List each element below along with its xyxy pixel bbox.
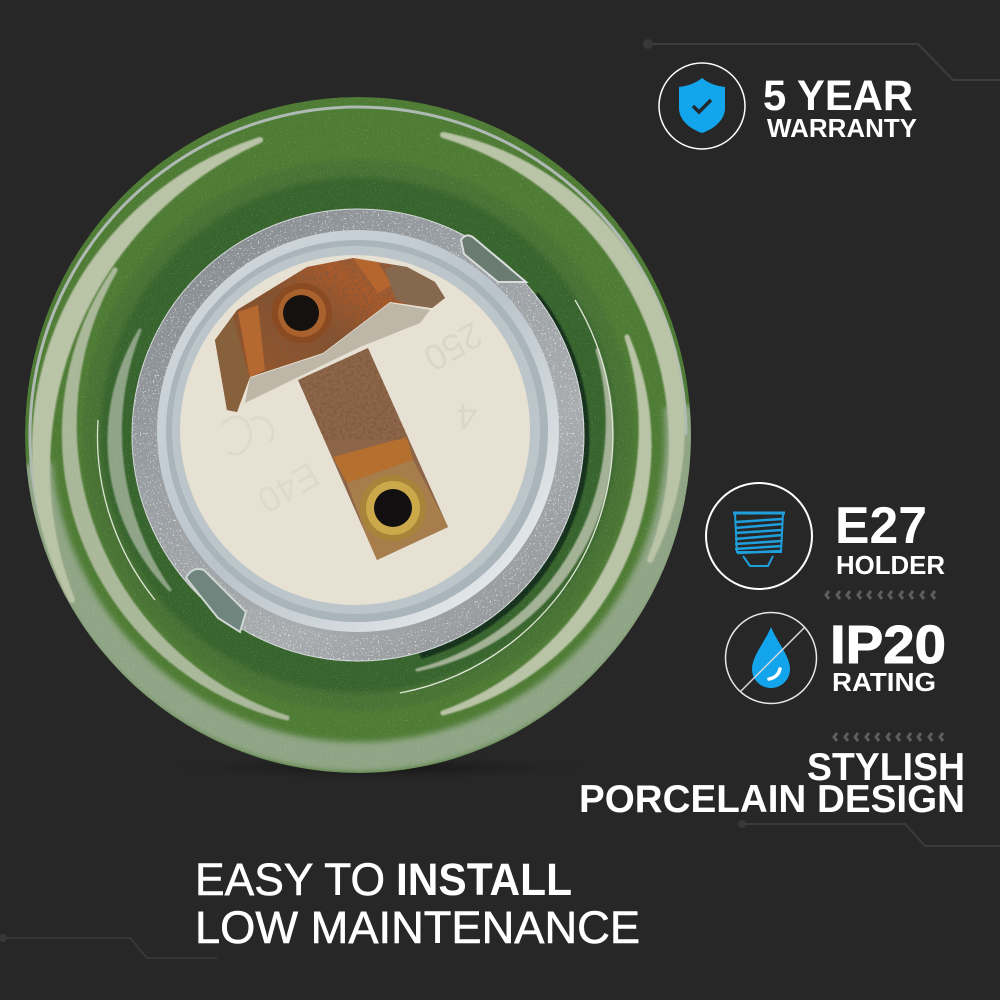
lower copper tab xyxy=(295,345,450,565)
pale band upper left xyxy=(35,140,260,600)
embossed markings: 4 xyxy=(457,396,477,437)
icon: water drop crossed out xyxy=(726,612,816,704)
E27 holder feature xyxy=(706,483,945,589)
glaze flecks xyxy=(20,90,700,780)
easy to install, low maintenance caption: EASY TO xyxy=(195,854,385,905)
rim highlight xyxy=(28,106,688,520)
inner band left xyxy=(109,330,170,590)
circuit line: top right xyxy=(643,39,1000,80)
glaze bands xyxy=(35,135,682,718)
chevron divider upper xyxy=(826,591,935,599)
easy to install, low maintenance caption: INSTALL xyxy=(396,854,572,905)
stylish porcelain design heading: PORCELAIN DESIGN xyxy=(579,778,965,821)
warranty badge xyxy=(659,63,917,149)
ceramic base xyxy=(180,255,530,605)
icon: shield with check xyxy=(659,63,745,149)
green porcelain body xyxy=(25,97,691,773)
IP20 text: RATING xyxy=(832,667,936,697)
pale band top right xyxy=(443,135,682,560)
pale band lower left xyxy=(64,270,287,718)
thin white line left xyxy=(97,420,155,600)
IP20 text: IP20 xyxy=(830,615,946,675)
warranty text xyxy=(763,72,917,143)
thin white line right xyxy=(400,300,613,693)
icon: bulb screw base xyxy=(706,483,812,589)
warranty text: WARRANTY xyxy=(767,113,917,143)
IP20 rating feature xyxy=(726,612,946,704)
pale band lower right xyxy=(443,337,649,713)
drop shadow xyxy=(140,754,620,782)
top copper contact xyxy=(210,255,450,415)
embossed markings: E40 xyxy=(251,454,326,522)
warranty text: 5 YEAR xyxy=(763,72,913,120)
dark gap beside the metal ring xyxy=(420,295,585,655)
metal retaining ring xyxy=(130,205,590,665)
E27 text xyxy=(835,497,945,580)
product photo: porcelain lamp holder xyxy=(25,97,691,773)
embossed markings: 250 xyxy=(417,314,490,380)
E27 text: HOLDER xyxy=(836,550,945,580)
crimp: top right xyxy=(461,235,526,282)
stylish porcelain design heading: STYLISH xyxy=(807,746,965,789)
easy to install, low maintenance caption: LOW MAINTENANCE xyxy=(195,902,640,953)
embossed markings xyxy=(222,314,490,522)
chevron divider lower xyxy=(834,733,943,741)
circuit line: lower left xyxy=(0,934,217,958)
crimp: bottom left xyxy=(186,569,246,632)
stylish porcelain design heading xyxy=(579,746,965,821)
circuit line: lower right xyxy=(738,820,1000,846)
inner band right xyxy=(417,350,612,670)
E27 text: E27 xyxy=(835,497,927,555)
easy to install, low maintenance caption xyxy=(195,854,640,953)
concentric glaze zones xyxy=(26,163,691,773)
